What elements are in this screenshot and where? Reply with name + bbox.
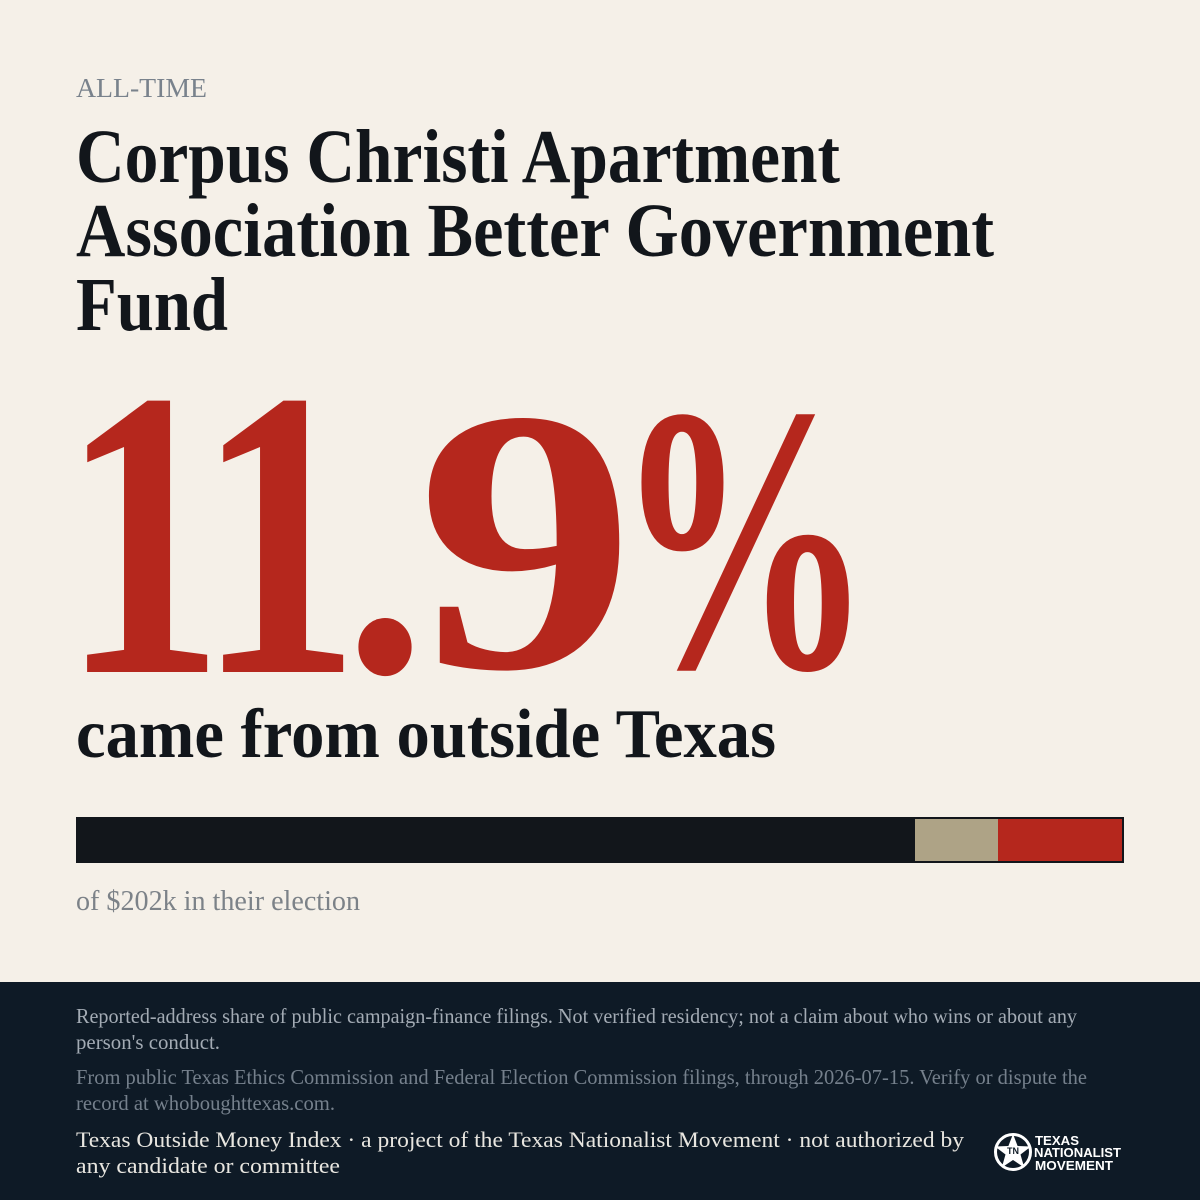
subheading: came from outside Texas bbox=[76, 696, 776, 773]
title: Corpus Christi Apartment bbox=[76, 115, 840, 199]
credit text: any candidate or committee bbox=[76, 1153, 340, 1178]
stacked bar bbox=[76, 817, 1124, 863]
disclaimer text: person's conduct. bbox=[76, 1030, 220, 1054]
big percentage bbox=[61, 306, 873, 761]
big percentage: 9 bbox=[417, 333, 635, 749]
logo: Texas Nationalist Movement: NATIONALIST bbox=[1034, 1145, 1121, 1160]
eyebrow: all-time: ALL-TIME bbox=[76, 73, 207, 103]
logo: Texas Nationalist Movement bbox=[995, 1133, 1121, 1173]
title bbox=[76, 115, 994, 347]
bar caption: of $202k in their election bbox=[76, 886, 360, 917]
title: Fund bbox=[76, 263, 228, 347]
disclaimer text: Reported-address share of public campaign-finance filings. Not verified residency; not a claim about who wins or about any bbox=[76, 1004, 1077, 1028]
source text: From public Texas Ethics Commission and Federal Election Commission filings, through 2026-07-15. Verify or dispute the bbox=[76, 1065, 1087, 1089]
source text bbox=[76, 1065, 1087, 1115]
credit text: Texas Outside Money Index · a project of the Texas Nationalist Movement · not authorized by bbox=[76, 1127, 964, 1152]
source text: record at whoboughttexas.com. bbox=[76, 1091, 335, 1115]
big percentage: . bbox=[344, 353, 426, 749]
logo: Texas Nationalist Movement: TN bbox=[1007, 1146, 1019, 1156]
title: Association Better Government bbox=[76, 189, 994, 273]
big percentage: 1 bbox=[197, 306, 360, 761]
big percentage: % bbox=[615, 329, 873, 750]
logo: Texas Nationalist Movement: MOVEMENT bbox=[1035, 1158, 1113, 1173]
footer panel bbox=[0, 982, 1200, 1200]
big percentage: 1 bbox=[61, 306, 224, 761]
logo: Texas Nationalist Movement: TEXAS bbox=[1035, 1133, 1079, 1148]
credit text bbox=[76, 1127, 964, 1178]
disclaimer text bbox=[76, 1004, 1077, 1054]
